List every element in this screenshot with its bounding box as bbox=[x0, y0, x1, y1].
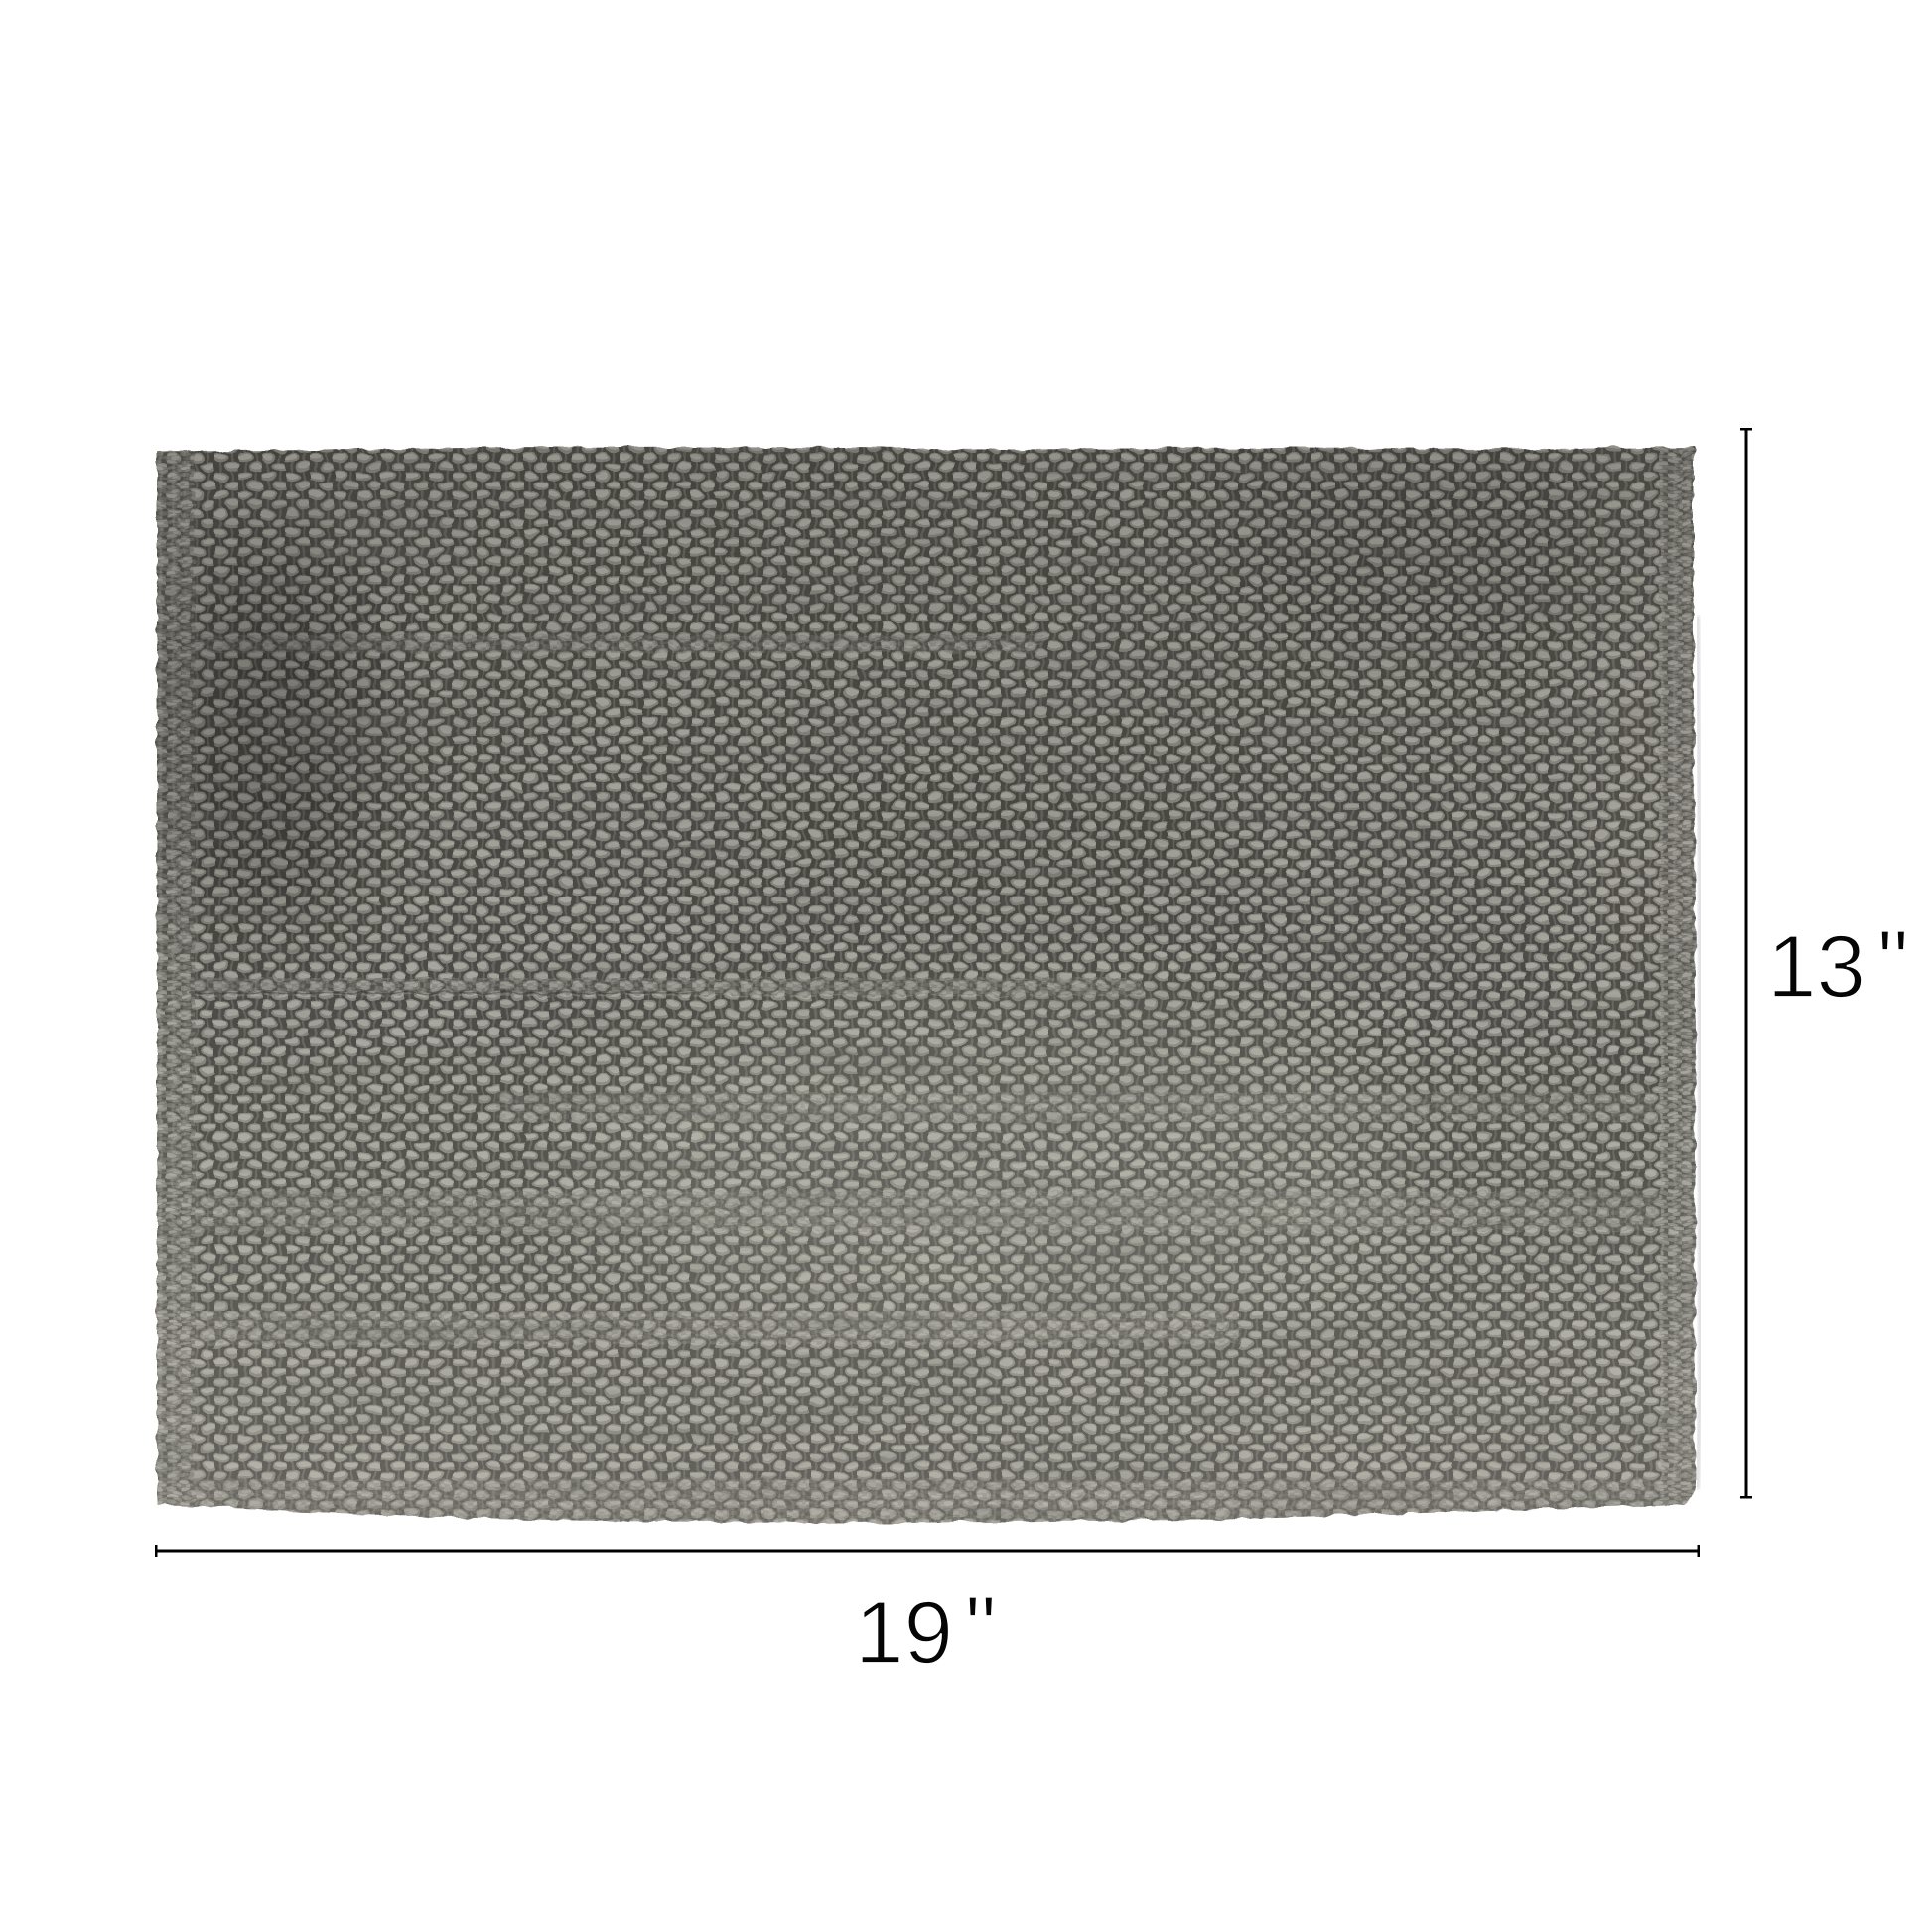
width label: " bbox=[965, 1578, 997, 1677]
horizontal thread streaks bbox=[149, 437, 1708, 1529]
height dimension line bbox=[1740, 428, 1752, 1499]
overall light falloff bbox=[149, 437, 1708, 1529]
finer woven border, left bbox=[155, 450, 197, 1507]
product dimension diagram bbox=[155, 428, 1904, 1664]
fold line bbox=[189, 992, 695, 994]
height label: " bbox=[1877, 911, 1909, 1011]
width label: 19 bbox=[855, 1583, 953, 1682]
finer woven border, bottom bbox=[149, 1479, 1708, 1529]
finer woven border, right bbox=[1658, 446, 1698, 1506]
woven rug photo bbox=[149, 417, 1710, 1529]
height label: 13 bbox=[1767, 916, 1865, 1016]
lighter patches of the weave bbox=[584, 500, 1690, 1340]
main weave texture bbox=[149, 437, 1708, 1529]
dark patches of the weave bbox=[169, 467, 1658, 933]
width dimension line bbox=[155, 1545, 1700, 1557]
finer woven bands across the body bbox=[149, 635, 1708, 1344]
edge shadow on right side of rug bbox=[1698, 616, 1700, 1489]
